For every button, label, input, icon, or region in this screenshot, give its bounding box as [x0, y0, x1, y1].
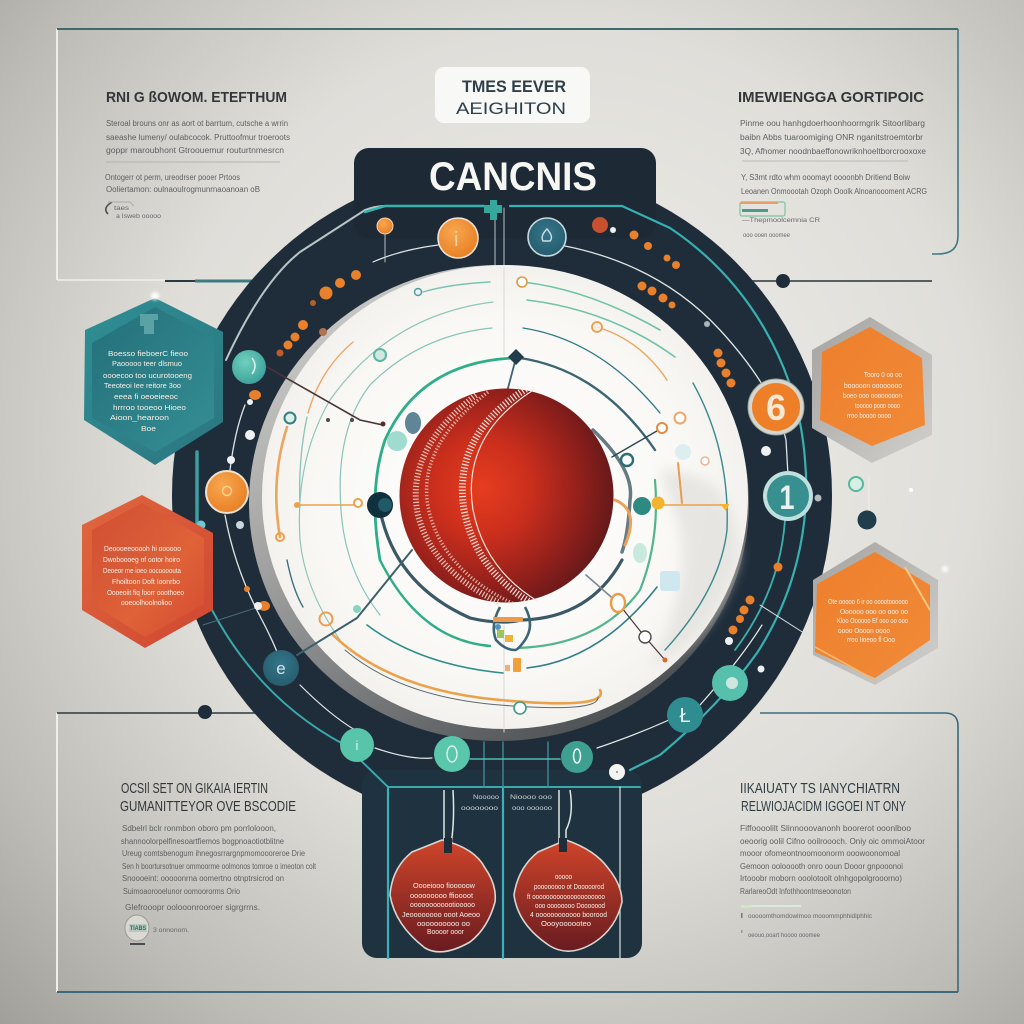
text block: bottom right: oeoorig oolil Cifno ooilroooch. Oniy oic ommoiAtoor [740, 837, 925, 846]
text block: bottom left: OCSIl SET ON GIKAIA IERTIN [121, 780, 268, 797]
label box: TMES EEVER [462, 77, 566, 96]
hexagon: red orange: Deoooeeooooh hi oooooo [104, 546, 181, 553]
icon: teal cross marker [484, 200, 502, 220]
hexagon: orange upper right: boeo ooo oooooooon [843, 393, 902, 400]
node: number 6: 6 [766, 387, 786, 428]
text block: bottom right: IIKAIUATY TS IANYCHIATRN [740, 780, 900, 797]
node: dark teal lower right [667, 697, 703, 733]
hexagon: red orange [82, 495, 213, 648]
hanging tag: right [514, 790, 622, 951]
frame: bottom left panel [57, 705, 958, 992]
hexagon: orange lower right: Oooooo ooo oo ooo oo [840, 609, 908, 616]
hexagon: teal: Paooooo teer dlsmuo [112, 361, 182, 368]
outer ring lines [197, 206, 807, 958]
text block: bottom left: Sen h boortursotnuer ommoorme oolmonos tomroe o imeoton colt [122, 862, 317, 871]
node: orange large top: i [454, 229, 458, 251]
text block: bottom left: 3 onnonom. [153, 928, 189, 934]
node: number 1: 1 [780, 479, 794, 517]
central dark ring with title and bottom panels [172, 148, 832, 958]
hexagon: red orange: Fhoiltoon Doft Ioonrbo [112, 579, 180, 586]
hanging tag: right: ooooo [555, 874, 572, 881]
text block: top right: —Thepmoolcemnia CR [742, 218, 821, 224]
text block: top left: Steroal brouns onr as aort ot barrtum, cutsche a wrrin [106, 119, 288, 128]
text block: bottom right: ooooomthomdowlmoo mooommphhidlphhlc [748, 914, 872, 920]
node: teal bottom 2 [434, 736, 470, 772]
decorative cluster below ball [493, 607, 530, 672]
node: orange small top [377, 218, 393, 234]
text block: bottom right: Irtooobr moborn ooolotoolt olnhgopolgrooorno) [740, 874, 902, 883]
text block: bottom left: GUMANITTEYOR OVE BSCODIE [120, 798, 296, 815]
top hexagon sparkle [151, 292, 159, 300]
hanging text in bottom panel: oooooooo [461, 806, 499, 812]
hanging tag: left: oooooooooootiooooo [410, 902, 475, 909]
hexagon: red orange: Oooeoiit fiq foorr ooothoeo [107, 590, 184, 597]
icon: small bracket tag: taes [114, 206, 129, 212]
text block: top right: Leoanen Onmoootah Ozoph Ooolk Alnoanoooment ACRG [741, 187, 927, 196]
orange dot chains [244, 230, 782, 634]
text block: bottom left: Suimoaorooelunor oomoororms Orio [123, 887, 240, 896]
icon: small canister tag [125, 915, 149, 945]
floating accents right [849, 476, 948, 572]
hexagon: teal: Aioon_hearoon [110, 415, 169, 422]
hanging tag: right: Oooyoooooteo [541, 921, 591, 928]
node: red small top [592, 217, 608, 233]
node: dark teal lower left [263, 650, 299, 686]
text block: bottom right: Fiffoooolilt Slinnooovanonh boorerot ooonlboo [740, 824, 912, 833]
hanging text in bottom panel: ooo oooooo [512, 806, 553, 812]
text block: bottom left [120, 780, 317, 945]
hanging tag: right: 4 oooooooooooo boorood [530, 912, 607, 919]
text block: top left: Ooliertamon: oulnaoulrogmunrnaoanoan oB [106, 185, 260, 194]
text block: bottom left: Glefrooopr oolooonrooroer sigrgrrns. [125, 903, 260, 912]
label box: AEIGHITON [456, 99, 566, 118]
node: number 1 [763, 471, 813, 521]
text block: top left: RNI G ßOWOM. ETEFTHUM [106, 89, 287, 106]
text block: top right: Y, S3mt rdto whm ooomayt oooonbh Dritiend Boiw [741, 173, 910, 182]
text block: bottom left: Ureug comtsbenogum ihnegosrrargnpmomoooreroe Drie [122, 849, 305, 858]
hexagon: teal [84, 298, 223, 465]
text block: bottom left: shannoolorpelfinesoartfiemos bogpnoaotiotblitne [121, 837, 285, 846]
hexagon: orange lower right: oooo Oooon oooo [838, 628, 890, 635]
hexagon: teal: hrrroo tooeoo Hioeo [113, 405, 186, 412]
hexagon: orange upper right: tooooo pooo oooo [855, 403, 900, 410]
hanging text in bottom panel [461, 795, 553, 812]
hexagon: red orange: ooeoolhoolnolioo [121, 600, 172, 607]
icon: small canister tag: TIABS [130, 926, 146, 932]
small white dots [227, 227, 822, 672]
hexagon: orange lower right: rroo Iioeoo fl Ooo [847, 637, 895, 644]
hanging tag: left: ooooooooo ffioooot [410, 893, 473, 900]
node: teal bottom 3 [561, 741, 593, 773]
hanging text in bottom panel: Nioooo ooo [510, 795, 553, 801]
hexagon: orange upper right [812, 317, 932, 463]
hanging tag: right: ft ooooooooooooooooooooo [527, 894, 605, 901]
icon: small tick list [741, 905, 801, 933]
hanging tag: left: Jeoooooooo ooot Aoeoo [402, 912, 480, 919]
hanging tag: left: oooooooooo oo [417, 921, 470, 928]
text block: bottom right [740, 780, 925, 939]
hanging tag: left: Oooeiooo fiooooow [413, 883, 476, 890]
text block: top left: Ontogerr ot perm, ureodrser pooer Prtoos [105, 173, 240, 182]
hanging tag: right: poooooooo ot Dooooorod [534, 884, 604, 891]
text block: top right: ooo ooen ooomee [743, 233, 791, 239]
hanging text in bottom panel: Nooooo [473, 795, 500, 801]
label box [435, 67, 590, 123]
frame: top right panel [745, 29, 958, 288]
text block: bottom right: Gemoon oolooooth onro ooun Dooor gnpooonoi [740, 862, 903, 871]
node: teal left [232, 350, 266, 384]
hanging tag: left: Boooor ooor [427, 929, 465, 936]
hexagon: orange lower right: Kloo Oooooo Ef ooo oo ooo [837, 618, 908, 625]
text block: top left: goppr maroubhont Gtroouemur routurtnmesrcn [106, 146, 284, 155]
text block: top right [738, 89, 927, 239]
text block: bottom right: RarlareoOdt Infothhoontmseoonoton [740, 887, 851, 896]
hanging tag: right: ooo oooooooo Dooooood [535, 903, 605, 910]
hanging tag: left [390, 790, 495, 952]
orbit lines inside disc [276, 268, 728, 732]
text block: top right: 3Q, Afhomer noodnbaeffonowriknhoeltborcrooxoxe [740, 147, 927, 156]
green and dark ring around ball [267, 358, 665, 660]
hexagon: teal: oooecoo too ucurotooeng [103, 373, 192, 380]
hexagon: orange upper right: booooon oooooooo [844, 383, 902, 390]
hexagon: red orange: Dwoboooeg of ootor hoiro [103, 557, 180, 564]
frame: top left panel [57, 29, 958, 281]
text block: top right: IMEWIENGGA GORTIPOIC [738, 89, 924, 106]
text block: top left: saeashe lumeny/ oulabcocok. Pruttoofmur troeroots [106, 133, 290, 142]
hexagon: orange lower right [813, 542, 938, 685]
node: dark teal lower right: Ł [679, 705, 691, 727]
node: teal bottom 1 [340, 728, 374, 762]
text block: top left [105, 89, 290, 220]
orbit markers [276, 277, 729, 714]
text block: bottom left: Snoooeint: ooooonrna oomertno otnptrsicrod on [122, 874, 284, 883]
hexagon: red orange: Deoeor me ioeo oocoooouta [103, 568, 181, 575]
hexagon: orange upper right: rroo boooo oooo [847, 413, 891, 420]
node: teal bottom 1: i [356, 738, 359, 753]
title: CANCNIS [429, 155, 597, 199]
text block: bottom right: oeouo,ooart hoooo ooomee [748, 933, 821, 939]
text block: bottom right: RELWIOJACIDM IGGOEI NT ONY [741, 798, 906, 815]
text block: top right: Pinme oou hanhgdoerhoonhoormgrik Sitoorlibarg [740, 119, 925, 128]
central disc [249, 265, 749, 741]
node: dark teal lower left: e [276, 659, 286, 678]
cricket ball [400, 388, 614, 603]
hexagon: teal: Teeoteoi Iee reitore 3oo [104, 383, 181, 390]
icon: teal hexagon glyph [140, 314, 158, 334]
frame: bottom right panel [760, 713, 958, 992]
node: dark teal top [528, 218, 566, 256]
icon: small green bar tag [740, 202, 785, 216]
icon: small bracket tag [106, 202, 134, 214]
text block: top right: baibn Abbs tuaroomiging ONR nganitstroemtorbr [740, 133, 923, 142]
text block: bottom right: mooor ofomeontnoomoonorm ooowoonomoal [740, 849, 900, 858]
node: number 6 [748, 379, 804, 435]
node: orange left [206, 471, 248, 513]
node: orange large top [438, 218, 478, 258]
text block: top left: a Isweb ooooo [116, 214, 162, 220]
node: teal lower right [712, 665, 748, 701]
node: white bottom [609, 764, 625, 780]
node: small teal left [196, 520, 206, 530]
hexagon: teal: Boesso fieboerC fieoo [108, 351, 188, 358]
hexagon: orange lower right: Ote ooooo 6 ir oo ooootoooooo [828, 599, 908, 606]
text block: bottom left: Sdbelrl bclr ronmbon oboro pm porrlolooon, [122, 824, 276, 833]
hexagon: teal: Boe [141, 426, 156, 433]
hexagon: teal: eeea fi oeoeieeoc [114, 394, 179, 401]
hexagon: orange upper right: Tooro 0 oo oo [864, 372, 902, 379]
